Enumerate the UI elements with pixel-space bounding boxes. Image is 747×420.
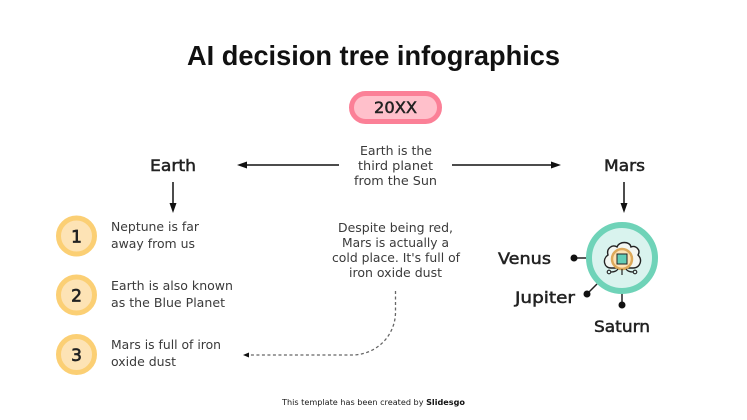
step 1: 1	[71, 228, 82, 248]
arrow: Earth down	[170, 182, 176, 213]
label: Jupiter: Jupiter	[514, 288, 575, 307]
arrow: to Mars	[452, 162, 561, 168]
root text: from the Sun	[354, 174, 437, 188]
step 3: Mars is full of iron	[111, 338, 221, 352]
connector: Saturn	[618, 293, 626, 308]
middle text: cold place. It's full of	[332, 251, 461, 265]
label: Venus: Venus	[498, 249, 551, 268]
arrow: Mars down	[620, 182, 628, 213]
title: AI decision tree infographics	[187, 40, 560, 71]
step 1	[58, 218, 199, 254]
step 2	[58, 277, 233, 313]
middle text	[332, 221, 461, 280]
year pill	[352, 94, 440, 122]
step 1: Neptune is far	[111, 220, 199, 234]
middle text: Mars is actually a	[342, 236, 449, 250]
step 3	[58, 336, 221, 372]
step 2: 2	[71, 286, 82, 306]
AI circle	[589, 225, 655, 291]
arrow: to Earth	[237, 162, 339, 168]
step 3: oxide dust	[111, 355, 176, 369]
step 3: 3	[71, 346, 82, 366]
step 1: away from us	[111, 237, 195, 251]
root text: Earth is the	[360, 144, 432, 158]
footer credit: This template has been created by Slidesgo	[281, 398, 466, 407]
middle text: Despite being red,	[338, 221, 453, 235]
year pill: 20XX	[374, 98, 417, 117]
heading: Earth: Earth	[150, 156, 196, 175]
step 2: as the Blue Planet	[111, 296, 225, 310]
connector: Jupiter	[584, 284, 597, 298]
label: Saturn: Saturn	[594, 317, 650, 336]
heading: Mars: Mars	[604, 156, 645, 175]
root text: third planet	[358, 159, 433, 173]
step 2: Earth is also known	[111, 279, 233, 293]
dashed arrow	[243, 291, 396, 358]
middle text: iron oxide dust	[349, 266, 442, 280]
connector: Venus	[570, 254, 587, 262]
icon: AI cloud chip	[604, 242, 640, 275]
root text	[354, 144, 437, 188]
